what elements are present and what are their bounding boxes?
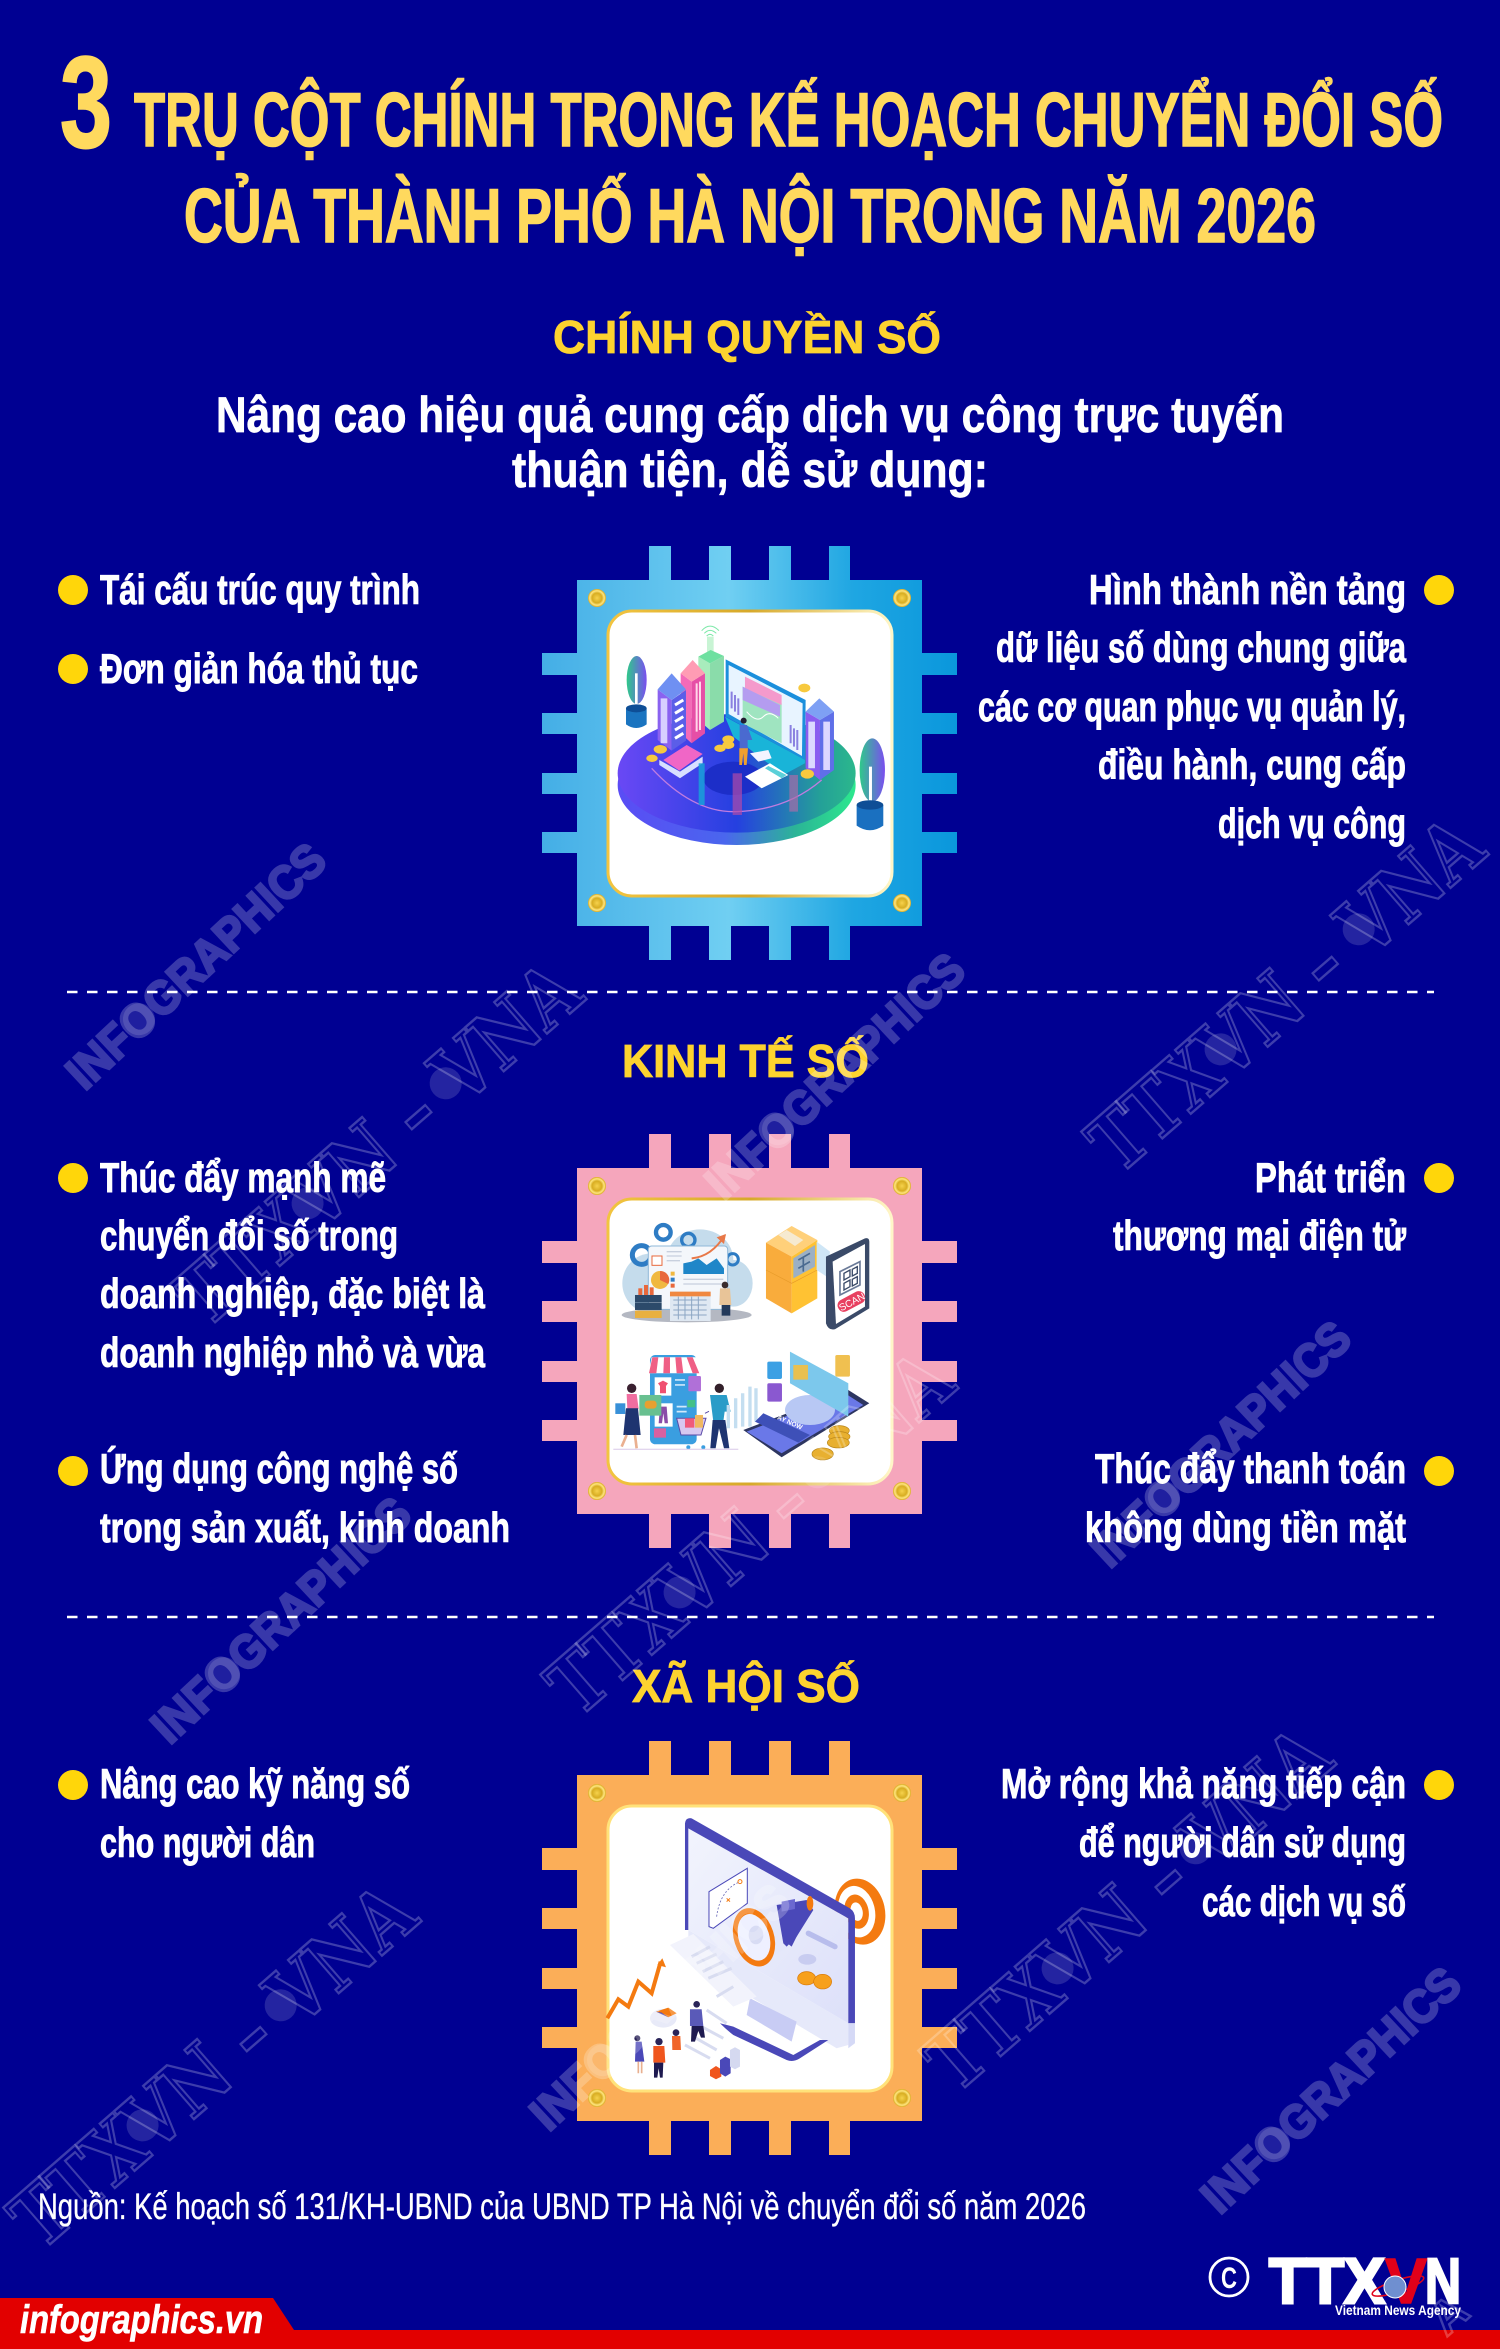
title xyxy=(60,29,1443,259)
watermark: infographics 2: INFOGRAPHICS xyxy=(694,942,975,1209)
heading: kinh tế số: KINH TẾ SỐ xyxy=(622,1035,869,1087)
section 2 left bullets: chuyển đổi số trong xyxy=(100,1212,398,1259)
mobile payment scene xyxy=(728,1352,869,1460)
section 2 left bullets: doanh nghiệp nhỏ và vừa xyxy=(100,1329,485,1376)
watermark: ttxvn 3: TTXVN – VNA xyxy=(529,1331,971,1734)
section 2 left bullets: trong sản xuất, kinh doanh xyxy=(100,1504,510,1551)
section 1 right bullet: điều hành, cung cấp xyxy=(1098,741,1406,788)
megaphone xyxy=(726,1896,813,1972)
section 2 right bullets: Thúc đẩy thanh toán xyxy=(1095,1445,1406,1492)
section 2 left bullets: Ứng dụng công nghệ số xyxy=(100,1444,458,1492)
subheading: thuận tiện, dễ sử dụng: xyxy=(512,442,988,498)
title number 3: 3 xyxy=(60,29,112,175)
watermark: ttxvn 6 tail: A xyxy=(1419,2284,1478,2345)
watermarks xyxy=(0,798,1500,2345)
heading: chính quyền số: CHÍNH QUYỀN SỐ xyxy=(553,311,941,363)
illustration: smart city platform xyxy=(618,626,885,845)
website tab: infographics.vn xyxy=(20,2298,263,2342)
logo: TTXVN: N xyxy=(1425,2245,1461,2317)
watermark: infographics 1: INFOGRAPHICS xyxy=(55,832,336,1099)
section 3 left bullet: Nâng cao kỹ năng số xyxy=(100,1760,410,1807)
section 1 left bullets: Tái cấu trúc quy trình xyxy=(100,566,420,613)
subheading xyxy=(216,387,1284,498)
watermark: ttxvn 4: TTXVN – VNA xyxy=(0,1864,434,2267)
section 1 left bullets xyxy=(58,566,420,692)
e-commerce scene xyxy=(613,1355,738,1449)
logo: TTXVN: TTX xyxy=(1269,2245,1385,2317)
section 1 right bullet: Hình thành nền tảng xyxy=(1089,566,1406,613)
section 1 right bullet: dịch vụ công xyxy=(1218,800,1406,847)
illustration: digital business, QR scan, e-commerce, payment xyxy=(613,1225,869,1460)
divider 2 xyxy=(67,1616,1434,1618)
footer red band xyxy=(0,2330,1500,2349)
section 2 right bullets: không dùng tiền mặt xyxy=(1085,1504,1406,1551)
divider 1 xyxy=(67,991,1434,993)
logo: TTXVN xyxy=(1269,2245,1461,2318)
section 3 left bullet xyxy=(58,1760,410,1866)
section 2 right bullets: Phát triển xyxy=(1255,1154,1406,1201)
source note: Nguồn: Kế hoạch số 131/KH-UBND của UBND TP Hà Nội về chuyển đổi số năm 2026 xyxy=(38,2186,1086,2227)
logo: TTXVN: V xyxy=(1385,2245,1427,2317)
section 2 left bullets xyxy=(58,1154,510,1551)
section 3 left bullet: cho người dân xyxy=(100,1819,315,1866)
section 2 left bullets: doanh nghiệp, đặc biệt là xyxy=(100,1270,485,1317)
illustration: digital marketing monitor with people xyxy=(607,1818,891,2079)
section 3 right bullet xyxy=(1001,1760,1454,1925)
watermark: infographics 3: INFOGRAPHICS xyxy=(1080,1310,1361,1577)
section 2 right bullets: thương mại điện tử xyxy=(1113,1212,1406,1259)
logo: TTXVN: Vietnam News Agency xyxy=(1335,2302,1461,2318)
watermark: infographics 5: INFOGRAPHICS xyxy=(519,1873,800,2140)
boxes and QR phone scene: SCAN xyxy=(838,1291,867,1314)
business dashboard scene xyxy=(622,1225,753,1322)
copyright symbol: C xyxy=(1221,2262,1237,2295)
copyright symbol xyxy=(1210,2258,1248,2296)
section 2 right bullets xyxy=(1085,1154,1454,1551)
heading: xã hội số: XÃ HỘI SỐ xyxy=(632,1660,860,1712)
section 2 left bullets: Thúc đẩy mạnh mẽ xyxy=(100,1154,386,1201)
subheading: Nâng cao hiệu quả cung cấp dịch vụ công trực tuyến xyxy=(216,387,1284,443)
chip: blue (digital government) xyxy=(542,546,957,960)
watermark: ttxvn 1: TTXVN – VNA xyxy=(157,942,599,1345)
watermark: infographics 4: INFOGRAPHICS xyxy=(140,1486,421,1753)
section 1 right bullet xyxy=(978,566,1454,847)
watermark: ttxvn 5: TTXVN – VNA xyxy=(907,1707,1349,2110)
boxes and QR phone scene xyxy=(766,1226,869,1330)
chip: orange (digital society) xyxy=(542,1741,957,2155)
section 1 left bullets: Đơn giản hóa thủ tục xyxy=(100,645,418,692)
chip: pink (digital economy) xyxy=(542,1134,957,1548)
watermark: infographics 6: INFOGRAPHICS xyxy=(1190,1956,1471,2223)
mobile payment scene: PAY NOW xyxy=(772,1413,804,1432)
section 3 right bullet: các dịch vụ số xyxy=(1202,1878,1406,1925)
